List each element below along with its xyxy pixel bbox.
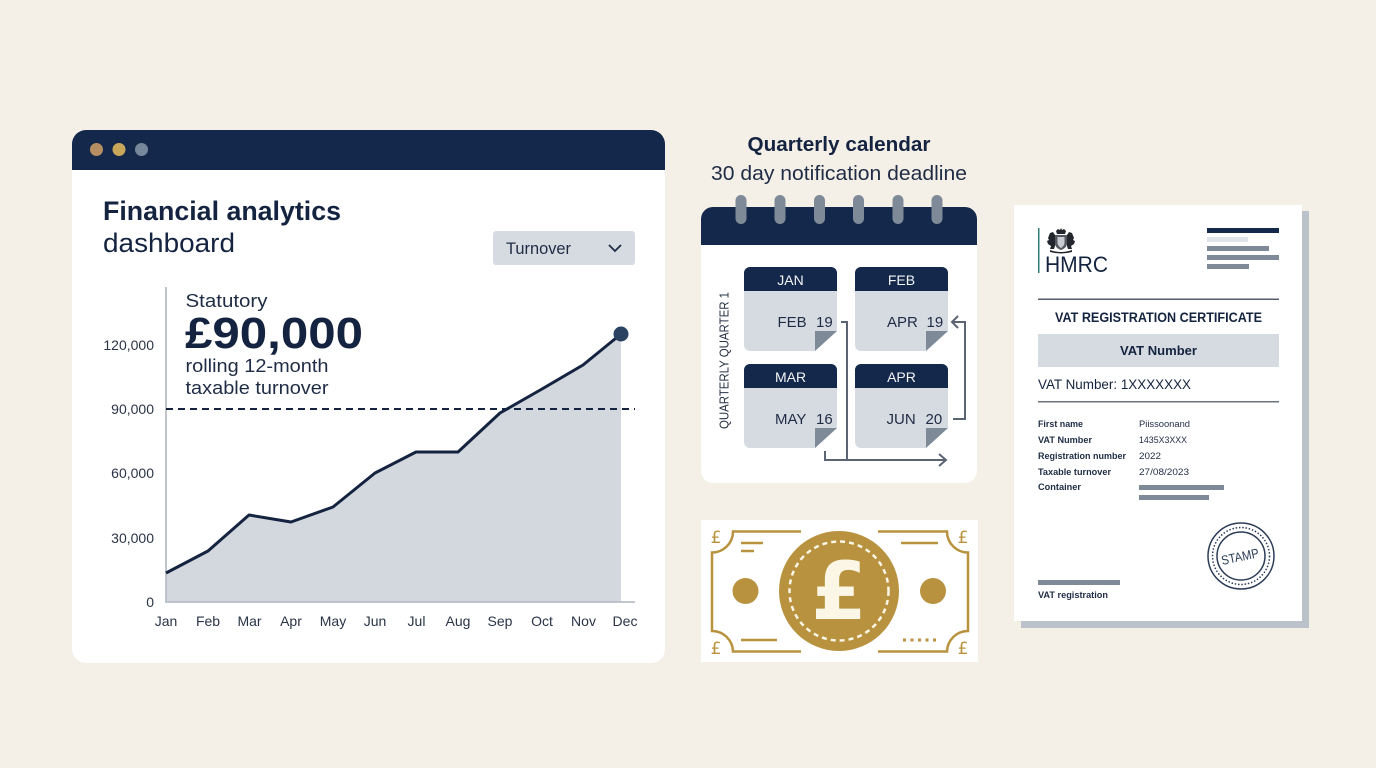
corner pound signs	[711, 528, 968, 659]
y axis labels: 90,000	[111, 401, 154, 417]
month card: Mar	[744, 364, 837, 448]
x axis labels: Mar	[237, 613, 262, 629]
heading: quarterly calendar: 30 day notification deadline	[711, 162, 967, 185]
VAT number value: VAT Number: 1XXXXXXX	[1038, 377, 1191, 392]
month card: Feb: APR	[887, 314, 918, 331]
statutory threshold callout: rolling 12-month	[186, 355, 328, 376]
corner pound signs: £	[958, 528, 968, 548]
x axis labels: Aug	[446, 613, 470, 629]
banknote decorative lines	[741, 543, 938, 640]
stamp	[1208, 523, 1274, 589]
month card: Jan: JAN	[777, 272, 804, 288]
side medallions	[732, 578, 946, 604]
month card: Mar: 16	[816, 411, 833, 428]
y axis labels: 30,000	[111, 530, 154, 546]
HMRC logo: HMRC	[1045, 252, 1108, 277]
certificate details: Taxable turnover	[1038, 467, 1112, 477]
redacted lines	[1139, 485, 1224, 500]
window title bar	[72, 130, 665, 170]
month card: Feb: 19	[926, 314, 943, 331]
banknote border	[712, 532, 968, 652]
x axis labels: Sep	[488, 613, 513, 629]
certificate details: VAT Number	[1038, 435, 1093, 445]
dashboard heading: Financial analytics	[103, 196, 341, 226]
vertical quarter label: QUARTERLY QUARTER 1	[716, 292, 732, 429]
calendar header	[701, 207, 977, 245]
month card: Apr: JUN	[886, 411, 916, 428]
x axis labels: Jun	[364, 613, 386, 629]
x axis labels: May	[320, 613, 346, 629]
corner pound signs: £	[711, 639, 721, 659]
x axis labels: Jan	[155, 613, 177, 629]
stamp: STAMP	[1220, 545, 1260, 568]
statutory threshold callout: £90,000	[185, 309, 363, 358]
statutory threshold callout	[185, 290, 363, 398]
x axis labels: Oct	[531, 613, 553, 629]
certificate details	[1038, 419, 1190, 492]
signature line and label: VAT registration	[1038, 590, 1108, 600]
panel: banknote	[701, 520, 978, 662]
area chart: rolling turnover	[166, 287, 635, 602]
HMRC logo	[1038, 228, 1108, 277]
month card: Jan: 19	[816, 314, 833, 331]
panel: financial analytics dashboard	[72, 130, 665, 663]
certificate details: Container	[1038, 482, 1081, 492]
VAT number banner: VAT Number	[1120, 343, 1197, 358]
panel: calendar	[701, 195, 977, 483]
month card: Mar: MAY	[775, 411, 806, 428]
gold pound coin	[779, 531, 899, 651]
dashboard heading	[103, 196, 341, 258]
certificate details: 1435X3XXX	[1139, 435, 1187, 445]
signature line and label	[1038, 580, 1120, 600]
x axis labels: Jul	[408, 613, 425, 629]
month card: Apr: APR	[887, 369, 916, 385]
certificate details: 27/08/2023	[1139, 467, 1189, 477]
month card: Apr	[855, 364, 948, 448]
window control dots	[90, 143, 148, 156]
certificate title: VAT REGISTRATION CERTIFICATE	[1055, 310, 1262, 325]
x axis labels: Nov	[571, 613, 596, 629]
y axis labels: 0	[146, 594, 154, 610]
month card: Apr: 20	[926, 411, 942, 428]
certificate details: Registration number	[1038, 451, 1126, 461]
month card: Mar: MAR	[775, 369, 806, 385]
royal crest	[1047, 228, 1075, 254]
heading: quarterly calendar: Quarterly calendar	[748, 133, 931, 156]
x axis labels: Feb	[196, 613, 220, 629]
corner pound signs: £	[711, 528, 721, 548]
corner pound signs: £	[958, 639, 968, 659]
VAT number banner	[1038, 334, 1279, 367]
gold pound coin: £	[811, 545, 867, 638]
header text lines	[1207, 228, 1279, 269]
certificate details: Piissoonand	[1139, 419, 1190, 429]
deadline arrows	[825, 316, 965, 466]
x axis labels: Apr	[280, 613, 302, 629]
month card: Feb: FEB	[888, 272, 915, 288]
certificate details: 2022	[1139, 451, 1161, 461]
dropdown: turnover	[493, 231, 635, 265]
y axis labels: 60,000	[111, 465, 154, 481]
x axis labels	[155, 613, 637, 629]
panel: VAT registration certificate	[1014, 205, 1309, 628]
month card: Jan	[744, 267, 837, 351]
month card: Feb	[855, 267, 948, 351]
y axis labels: 120,000	[103, 337, 154, 353]
certificate shadow	[1021, 211, 1309, 628]
dropdown: turnover: Turnover	[506, 240, 571, 258]
dashboard heading: dashboard	[103, 228, 235, 258]
statutory threshold callout: taxable turnover	[186, 377, 328, 398]
month card: Jan: FEB	[778, 314, 807, 331]
x axis labels: Dec	[613, 613, 637, 629]
certificate details: First name	[1038, 419, 1083, 429]
heading: quarterly calendar	[711, 133, 967, 185]
binder rings	[736, 195, 942, 224]
statutory threshold callout: Statutory	[186, 290, 268, 311]
y axis labels	[103, 337, 154, 610]
